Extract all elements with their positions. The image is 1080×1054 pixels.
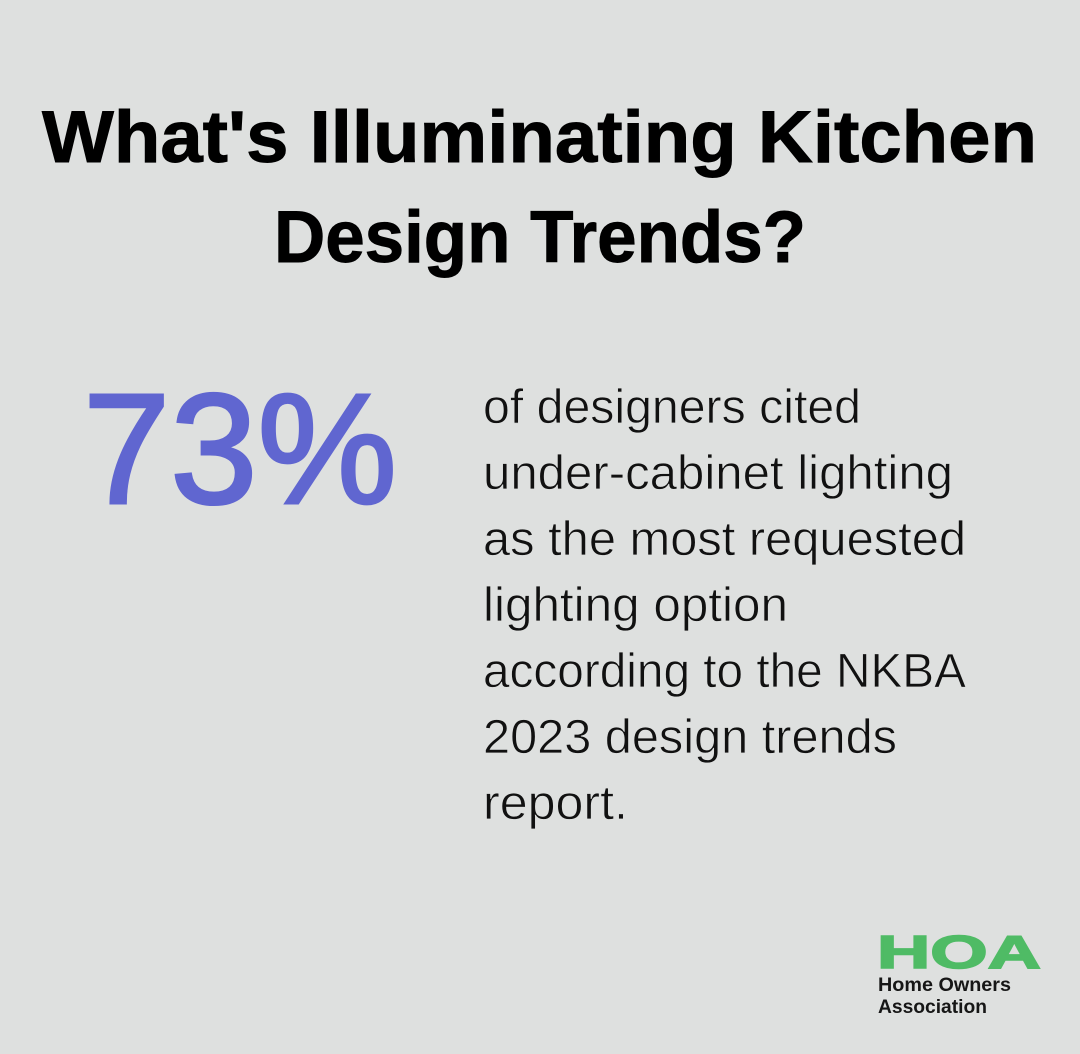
description text: 2023 design trends <box>483 711 897 764</box>
description text: according to the NKBA <box>483 645 966 698</box>
description text: of designers cited <box>483 381 861 434</box>
title: Design Trends? <box>274 197 806 278</box>
description text: as the most requested <box>483 513 966 566</box>
description text: lighting option <box>483 579 788 632</box>
logo name: Association <box>878 996 987 1018</box>
title <box>42 97 1037 278</box>
description text: under-cabinet lighting <box>483 447 953 500</box>
big statistic: 73%: 73% <box>83 362 397 537</box>
logo: HOA Home Owners Association <box>877 926 1041 1018</box>
logo mark: HOA: HOA <box>877 926 1041 978</box>
description text <box>483 381 966 830</box>
title: What's Illuminating Kitchen <box>42 97 1037 178</box>
logo name: Home Owners <box>878 974 1011 996</box>
description text: report. <box>483 777 628 830</box>
logo name <box>878 974 1011 1018</box>
